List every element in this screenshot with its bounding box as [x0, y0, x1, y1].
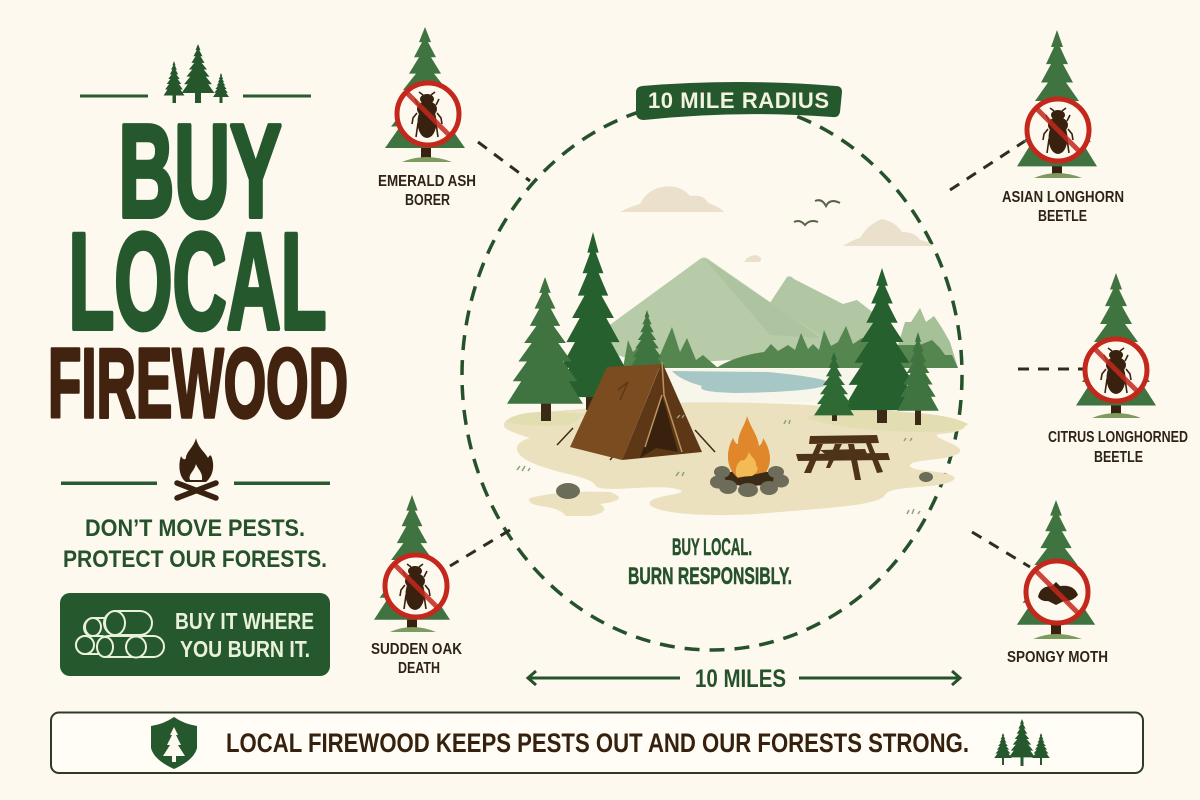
title — [48, 98, 348, 438]
forest band — [623, 326, 958, 368]
icon: stacked logs — [76, 611, 164, 658]
panel: bottom banner: LOCAL FIREWOOD KEEPS PESTS OUT AND OUR FORESTS STRONG. — [226, 728, 969, 758]
panel: buy it where you burn it: YOU BURN IT. — [180, 636, 310, 662]
badge: 10 mile radius — [636, 82, 842, 120]
panel: buy it where you burn it — [60, 593, 330, 676]
slogan: don't move pests — [63, 515, 327, 573]
panel: bottom banner — [51, 712, 1143, 773]
pest: sudden oak death: DEATH — [398, 660, 440, 677]
rock — [556, 472, 933, 499]
campsite scene — [504, 186, 968, 516]
sand ground — [504, 402, 965, 515]
picnic table — [796, 435, 890, 480]
center slogan: BURN RESPONSIBLY. — [628, 563, 792, 590]
tree: dark left — [555, 232, 631, 410]
pest: asian longhorn beetle: BEETLE — [1038, 208, 1087, 225]
tent — [557, 362, 715, 460]
campfire — [710, 416, 789, 497]
grass tufts — [517, 415, 920, 514]
icon: three pine trees with rule lines — [80, 44, 311, 103]
icon: campfire with rule lines — [61, 438, 330, 498]
clouds — [620, 186, 933, 262]
tree: small mid — [630, 310, 664, 368]
title: LOCAL — [68, 206, 326, 358]
icon: three pines — [994, 719, 1050, 766]
slogan: don't move pests: DON’T MOVE PESTS. — [85, 515, 305, 542]
center slogan — [628, 534, 792, 590]
icon: forest shield — [151, 717, 197, 769]
pest: citrus longhorned beetle: BEETLE — [1094, 449, 1143, 466]
pest: asian longhorn beetle: ASIAN LONGHORN — [1002, 189, 1124, 206]
pest: citrus longhorned beetle — [1018, 273, 1188, 466]
arrow: 10 miles scale: 10 MILES — [695, 665, 786, 693]
tree: mid small — [814, 352, 854, 421]
title: BUY — [118, 98, 282, 244]
pest: sudden oak death — [371, 495, 510, 677]
lake — [660, 369, 860, 403]
arrow: 10 miles scale — [528, 665, 960, 693]
tree: right large — [843, 268, 921, 423]
title: FIREWOOD — [48, 328, 348, 438]
pest: emerald ash borer: EMERALD ASH — [378, 173, 476, 190]
badge: 10 mile radius: 10 MILE RADIUS — [648, 88, 829, 113]
pest: spongy moth — [972, 500, 1108, 666]
tree: light left — [507, 277, 583, 421]
pest: emerald ash borer: BORER — [405, 192, 450, 209]
panel: buy it where you burn it: BUY IT WHERE — [175, 608, 314, 634]
mountains — [596, 258, 958, 368]
birds — [794, 200, 840, 225]
pest: asian longhorn beetle — [950, 30, 1124, 225]
pest: sudden oak death: SUDDEN OAK — [371, 641, 462, 658]
center slogan: BUY LOCAL. — [672, 534, 752, 561]
pest: spongy moth: SPONGY MOTH — [1007, 649, 1108, 666]
slogan: don't move pests: PROTECT OUR FORESTS. — [63, 546, 327, 573]
pest: emerald ash borer — [378, 27, 530, 209]
tree: right small — [897, 332, 939, 425]
radius circle — [462, 100, 962, 650]
